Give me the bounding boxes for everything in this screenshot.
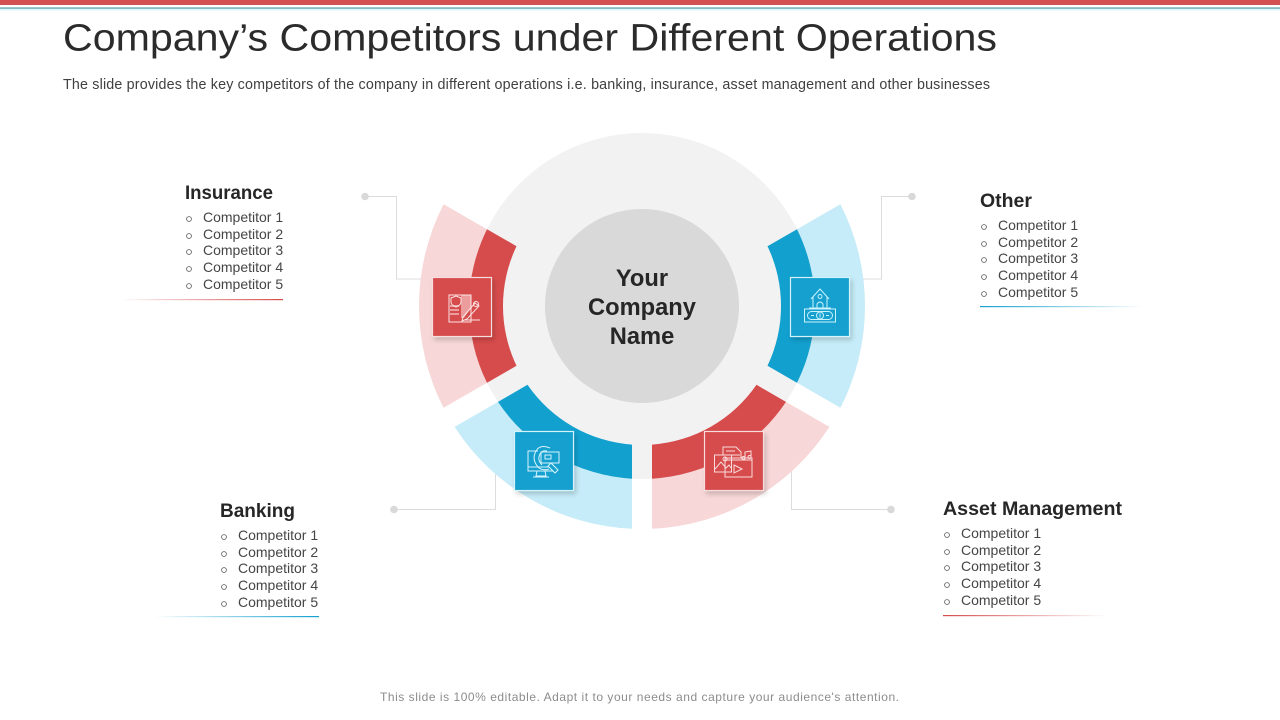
- list: banking competitors: Competitor 2: [238, 544, 318, 560]
- list: banking competitors: Competitor 5: [238, 594, 318, 610]
- panel: insurance: [120, 183, 283, 300]
- dark ring segments: [469, 229, 815, 479]
- list: insurance competitors: Competitor 3: [203, 242, 283, 258]
- panel: other: [980, 191, 1143, 307]
- list: asset management competitors: Competitor 5: [961, 592, 1041, 608]
- list: other competitors: Competitor 4: [998, 267, 1078, 283]
- list: banking competitors: Competitor 3: [238, 560, 318, 576]
- list: asset management competitors: Competitor 1: [961, 525, 1041, 541]
- outer light segments: [419, 204, 865, 529]
- subtitle: The slide provides the key competitors of the company in different operations i.e. banking, insurance, asset management and other businesses: [63, 77, 990, 93]
- heading: asset management: Asset Management: [943, 499, 1123, 520]
- connector: insurance: [361, 193, 432, 279]
- list: banking competitors: Competitor 1: [238, 527, 318, 543]
- top accent bar: [0, 0, 1280, 11]
- list: other competitors: [982, 217, 1078, 300]
- center circle: your company name: Your: [616, 266, 668, 292]
- list: banking competitors: Competitor 4: [238, 577, 318, 593]
- list: other competitors: Competitor 3: [998, 250, 1078, 266]
- panel: asset management: [943, 499, 1123, 616]
- icon: insurance document: [432, 278, 492, 336]
- list: asset management competitors: Competitor 4: [961, 575, 1041, 591]
- connector: banking: [390, 470, 496, 513]
- list: asset management competitors: [945, 525, 1041, 608]
- center circle: your company name: [545, 209, 739, 403]
- outer gray disc: [469, 133, 815, 479]
- title: Company’s Competitors under Different Operations: [63, 18, 997, 60]
- list: insurance competitors: [187, 209, 283, 292]
- list: insurance competitors: Competitor 4: [203, 259, 283, 275]
- list: other competitors: Competitor 1: [998, 217, 1078, 233]
- connector: other: [850, 193, 916, 279]
- center circle: your company name: Name: [610, 324, 674, 350]
- footer note: This slide is 100% editable. Adapt it to your needs and capture your audience's attention.: [380, 690, 899, 704]
- icon: house and banknote: [790, 278, 850, 336]
- list: insurance competitors: Competitor 2: [203, 226, 283, 242]
- connector: asset management: [792, 470, 895, 513]
- heading: banking: Banking: [220, 501, 295, 522]
- heading: insurance: Insurance: [185, 183, 273, 204]
- icon: monitor with magnifier: [514, 432, 574, 490]
- list: banking competitors: [222, 527, 318, 610]
- list: other competitors: Competitor 2: [998, 234, 1078, 250]
- list: asset management competitors: Competitor 2: [961, 542, 1041, 558]
- panel: banking: [155, 501, 319, 617]
- list: asset management competitors: Competitor 3: [961, 558, 1041, 574]
- icon: media files: [704, 432, 764, 490]
- center circle: your company name: Company: [588, 295, 697, 321]
- list: insurance competitors: Competitor 5: [203, 276, 283, 292]
- list: insurance competitors: Competitor 1: [203, 209, 283, 225]
- heading: other: Other: [980, 191, 1033, 212]
- list: other competitors: Competitor 5: [998, 284, 1078, 300]
